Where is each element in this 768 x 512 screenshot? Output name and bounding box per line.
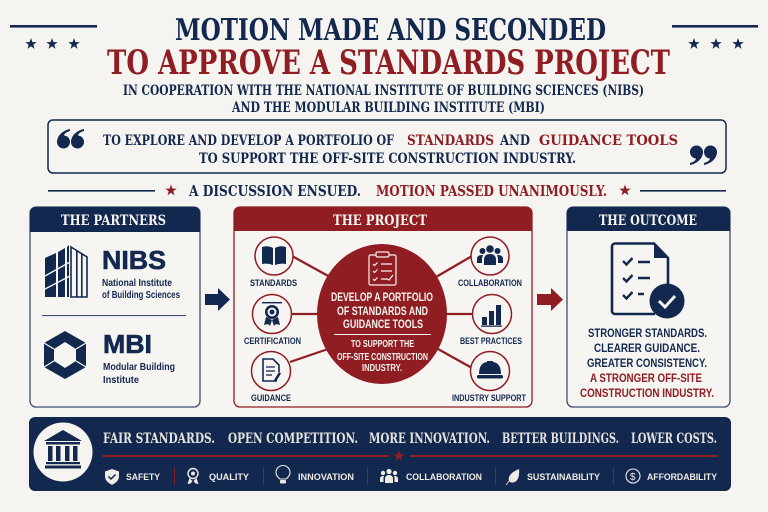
icon: closing quote — [690, 146, 717, 165]
node: standards — [250, 237, 297, 289]
banner: discussion result: MOTION PASSED UNANIMOUSLY. — [376, 183, 607, 200]
central text — [331, 290, 433, 374]
NIBS name — [102, 245, 180, 301]
icon: clipboard checklist — [369, 252, 396, 285]
value: innovation — [276, 466, 354, 484]
quote text: GUIDANCE TOOLS — [539, 133, 678, 149]
banner: discussion result: A DISCUSSION ENSUED. — [188, 183, 361, 200]
value: affordability: AFFORDABILITY — [647, 472, 718, 483]
value: collaboration — [380, 469, 482, 483]
value: safety: SAFETY — [126, 472, 161, 483]
panel header: the outcome — [567, 207, 730, 231]
callout: quote box — [48, 120, 726, 173]
panel header: the project: THE PROJECT — [333, 213, 427, 229]
node: collaboration — [458, 237, 522, 289]
value: collaboration: COLLABORATION — [406, 472, 482, 483]
MBI name: Modular Building — [103, 361, 175, 373]
value: affordability: $ — [630, 472, 636, 483]
panel: the outcome — [567, 207, 730, 407]
node: guidance: GUIDANCE — [251, 393, 291, 404]
node: certification — [244, 294, 301, 347]
panel header: the outcome: THE OUTCOME — [599, 213, 697, 229]
subtitle: AND THE MODULAR BUILDING INSTITUTE (MBI) — [231, 100, 545, 116]
subtitle: IN COOPERATION WITH THE NATIONAL INSTITUTE OF BUILDING SCIENCES (NIBS) — [123, 83, 644, 99]
central text: DEVELOP A PORTFOLIO — [331, 290, 433, 304]
value: sustainability: SUSTAINABILITY — [527, 472, 601, 483]
outcome text: CONSTRUCTION INDUSTRY. — [580, 386, 714, 400]
quote text: TO EXPLORE AND DEVELOP A PORTFOLIO OF — [103, 133, 394, 149]
panel header: the partners: THE PARTNERS — [61, 213, 166, 229]
outcome text: A STRONGER OFF-SITE — [590, 371, 702, 385]
title — [107, 13, 670, 83]
arrow: project to outcome — [537, 288, 563, 311]
value: safety — [105, 469, 161, 485]
central circle — [317, 244, 447, 384]
central text: GUIDANCE TOOLS — [343, 317, 423, 331]
MBI name: Institute — [103, 374, 139, 386]
slogans — [103, 431, 717, 447]
node: standards: STANDARDS — [250, 278, 297, 289]
value: quality — [188, 468, 250, 484]
node: best practices — [460, 294, 522, 347]
outcome text: STRONGER STANDARDS. — [588, 326, 707, 340]
title: TO APPROVE A STANDARDS PROJECT — [107, 43, 670, 83]
slogans: FAIR STANDARDS. — [103, 431, 215, 447]
arrow: partners to project — [205, 288, 230, 311]
slogans: MORE INNOVATION. — [369, 431, 490, 447]
NIBS name: National Institute — [102, 277, 172, 289]
node: certification: CERTIFICATION — [244, 336, 301, 347]
icon: document with check badge — [612, 244, 684, 318]
MBI name: MBI — [103, 329, 152, 359]
node: collaboration: COLLABORATION — [458, 278, 522, 289]
decoration: top-right rule and stars — [672, 25, 758, 49]
slogans: OPEN COMPETITION. — [228, 431, 358, 447]
decoration: top-left rule and stars — [10, 25, 97, 49]
title: MOTION MADE AND SECONDED — [175, 13, 606, 48]
panel: the project — [234, 207, 532, 407]
node: industry support — [452, 352, 526, 404]
node: industry support: INDUSTRY SUPPORT — [452, 393, 526, 404]
value: affordability — [626, 469, 718, 483]
icon: institution building — [34, 422, 92, 482]
central text: OFF-SITE CONSTRUCTION — [337, 352, 428, 363]
divider with star — [102, 450, 718, 461]
central text: TO SUPPORT THE — [351, 339, 414, 350]
banner: discussion result — [48, 183, 726, 200]
value: innovation: INNOVATION — [298, 472, 354, 483]
quote text: STANDARDS — [407, 133, 494, 149]
panel header: the project — [234, 207, 532, 231]
slogans: BETTER BUILDINGS. — [502, 431, 619, 447]
quote text: TO SUPPORT THE OFF-SITE CONSTRUCTION INDUSTRY. — [199, 151, 576, 167]
slogans: LOWER COSTS. — [631, 431, 717, 447]
NIBS name: NIBS — [102, 245, 166, 275]
quote text — [103, 133, 678, 167]
outcome text — [580, 326, 714, 400]
central text: INDUSTRY. — [362, 363, 402, 374]
icon: MBI hexagon — [44, 331, 86, 379]
column separators — [174, 468, 614, 484]
value: quality: QUALITY — [209, 472, 250, 483]
panel header: the partners — [30, 207, 200, 232]
outcome text: GREATER CONSISTENCY. — [587, 356, 707, 370]
NIBS name: of Building Sciences — [102, 289, 180, 301]
node: best practices: BEST PRACTICES — [460, 336, 522, 347]
value: sustainability — [506, 469, 601, 485]
central text: OF STANDARDS AND — [337, 304, 428, 318]
node: guidance — [251, 352, 291, 404]
MBI name — [103, 329, 175, 386]
connector lines — [290, 256, 473, 368]
subtitle — [123, 83, 644, 116]
outcome text: CLEARER GUIDANCE. — [594, 341, 700, 355]
icon: opening quote — [57, 129, 84, 148]
quote text: AND — [499, 133, 530, 149]
panel: bottom values band — [29, 417, 731, 491]
panel: the partners — [30, 207, 200, 407]
icon: NIBS building — [45, 245, 87, 297]
